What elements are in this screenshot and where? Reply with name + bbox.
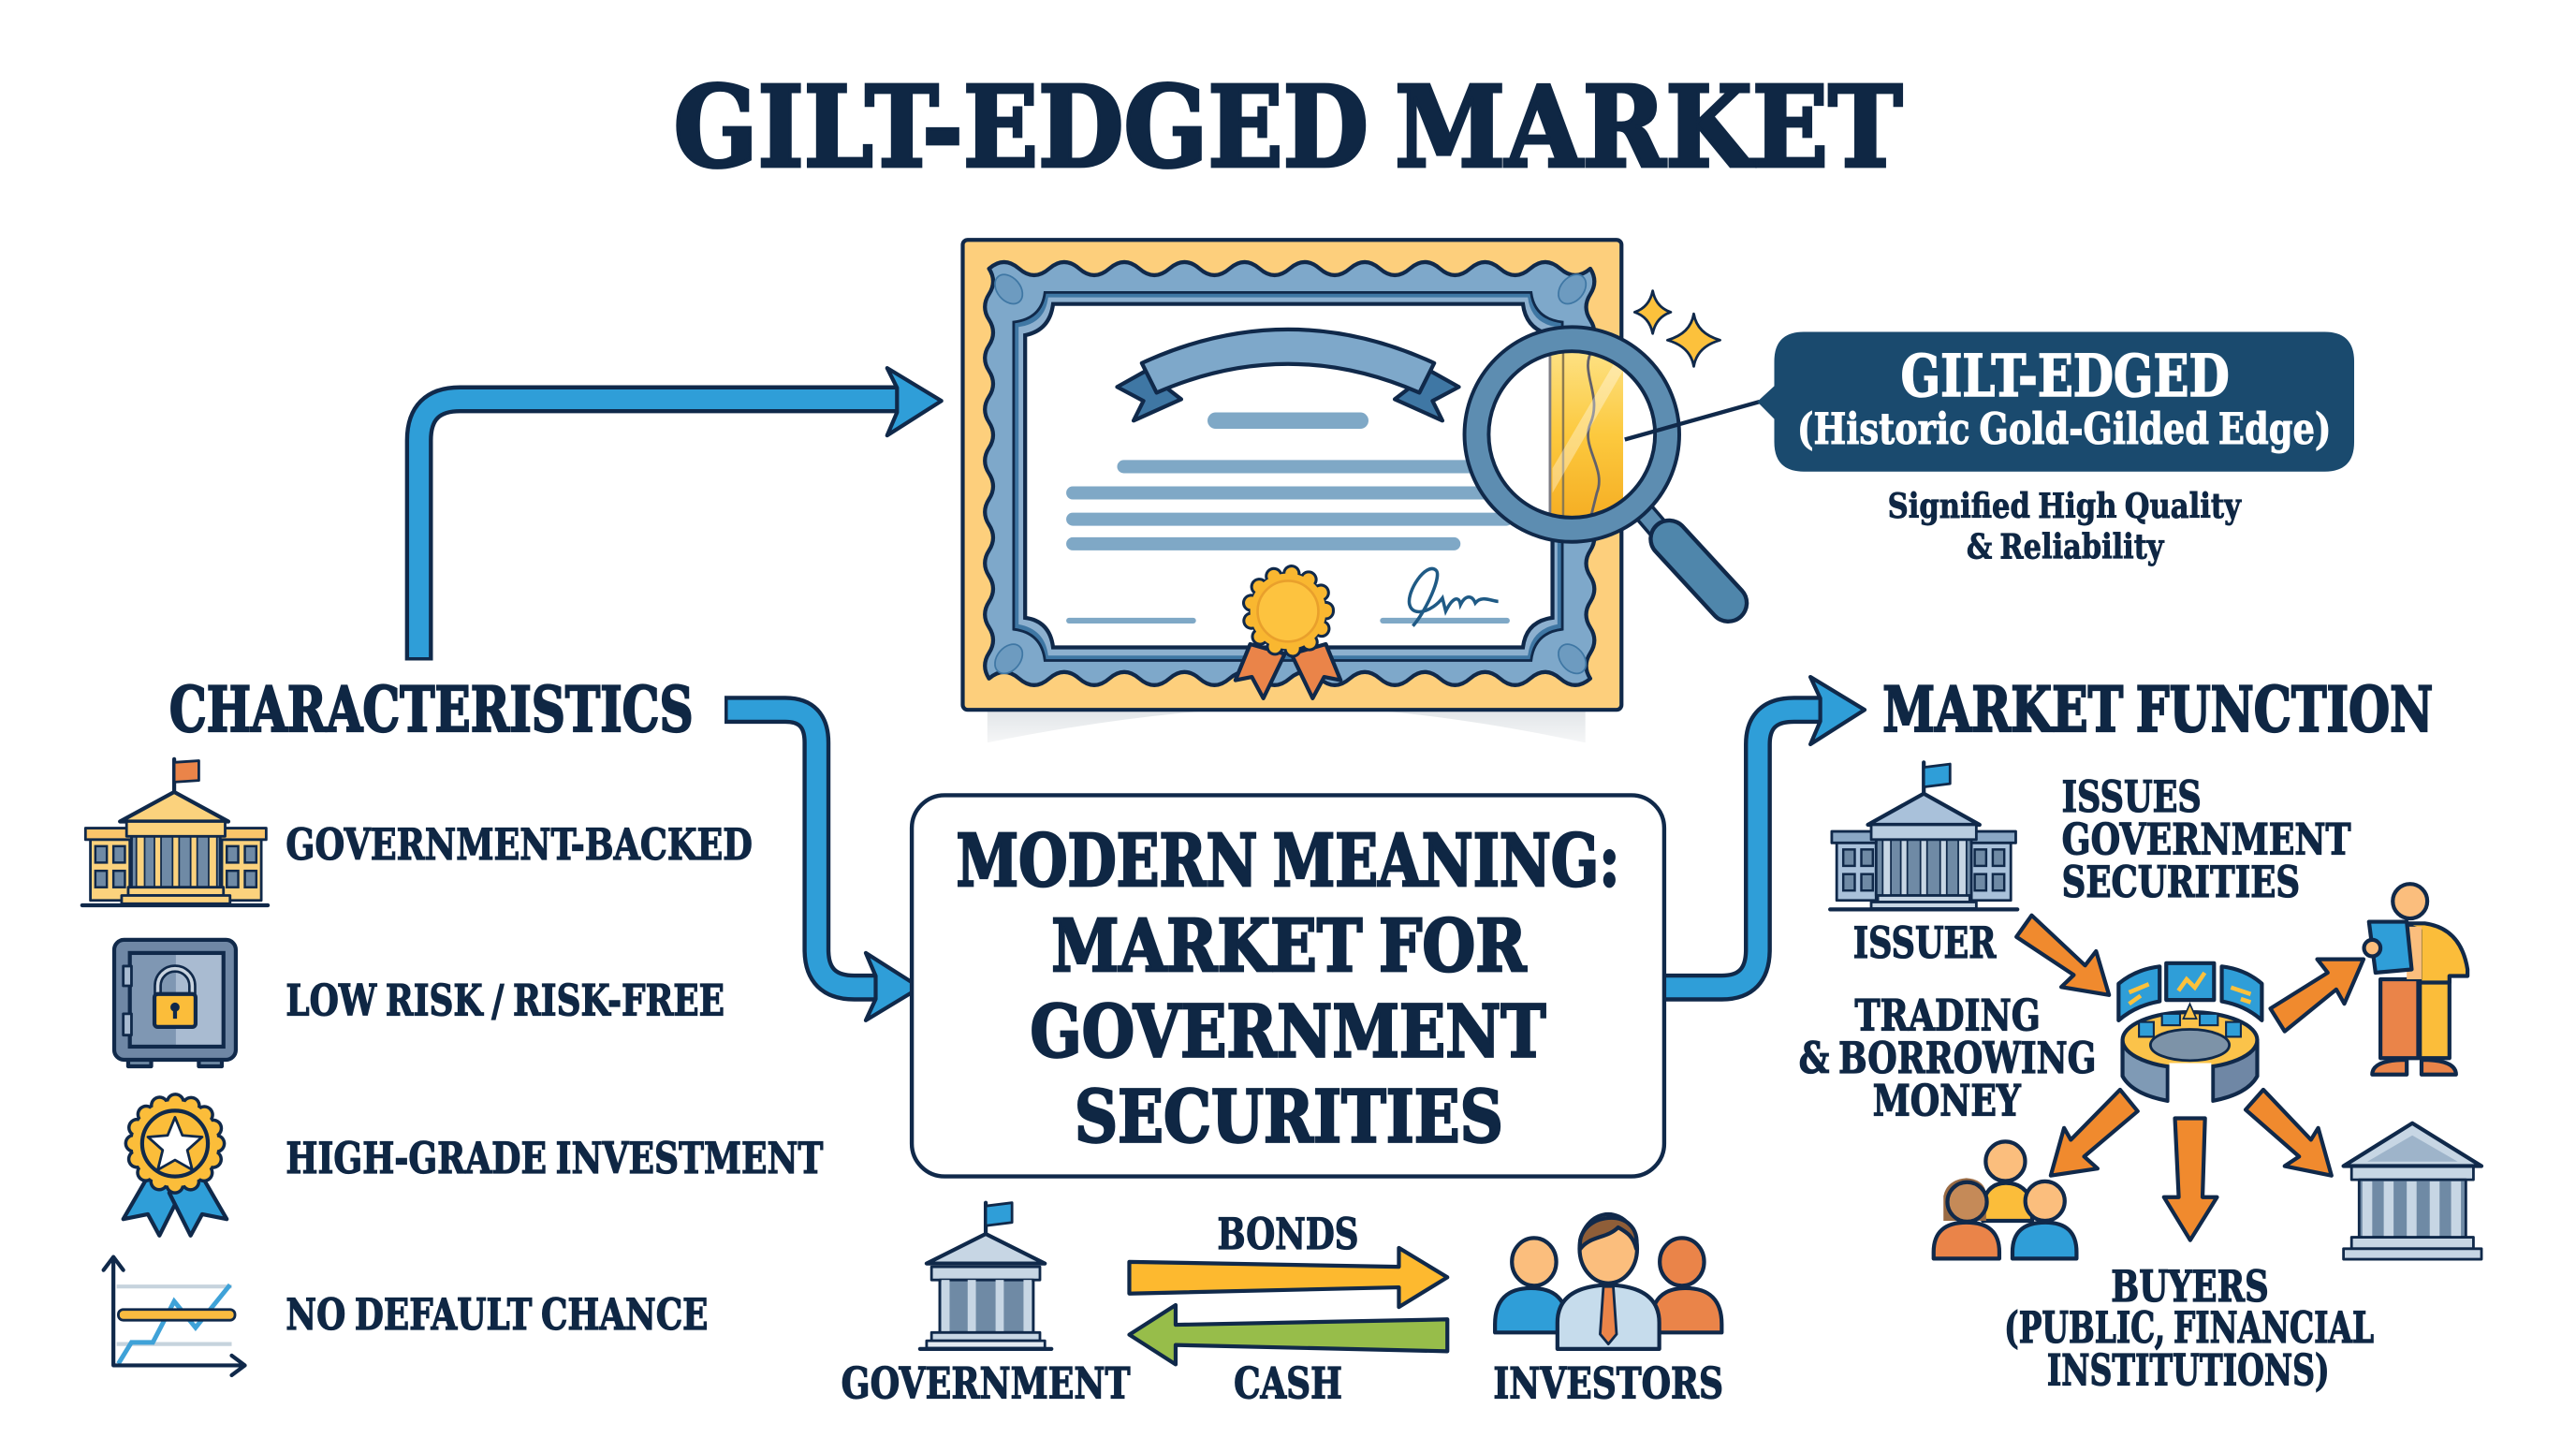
certificate wavy guilloche border bbox=[985, 262, 1594, 685]
hub screens bbox=[2118, 963, 2261, 1020]
icon: institution bank bbox=[2344, 1123, 2481, 1259]
arrow: market to buyers bbox=[2164, 1118, 2217, 1240]
label: trading and borrowing money: TRADING bbox=[1854, 990, 2041, 1040]
text: signified high quality: Signified High Quality bbox=[1888, 485, 2242, 526]
certificate inner frame bbox=[1014, 292, 1562, 661]
icon: stable line chart bbox=[104, 1257, 245, 1375]
arrow: issuer to market bbox=[2016, 916, 2109, 995]
icon: issuer building bbox=[1830, 762, 2017, 909]
panel: modern meaning: SECURITIES bbox=[1075, 1075, 1503, 1160]
certificate text bars bbox=[1066, 413, 1513, 624]
label: issues government securities: ISSUES bbox=[2062, 771, 2202, 822]
certificate frame light band bbox=[1018, 298, 1558, 655]
label: investors: INVESTORS bbox=[1493, 1358, 1723, 1409]
icon: person with tablet bbox=[2364, 884, 2467, 1075]
label: government-backed: GOVERNMENT-BACKED bbox=[285, 819, 753, 870]
arrow: market to institutions bbox=[2246, 1090, 2332, 1176]
panel: modern meaning: GOVERNMENT bbox=[1030, 989, 1546, 1074]
diagram: market function bbox=[1799, 762, 2481, 1395]
banner ribbon bbox=[1117, 330, 1459, 420]
arrow: characteristics to modern meaning bbox=[724, 710, 920, 1020]
panel: modern meaning: MODERN MEANING: bbox=[956, 818, 1620, 903]
certificate illustration bbox=[963, 240, 1728, 742]
label: issues government securities: SECURITIES bbox=[2062, 857, 2300, 907]
panel: modern meaning: MARKET FOR bbox=[1051, 903, 1527, 989]
arrow: cash bbox=[1129, 1305, 1447, 1364]
signature bbox=[1409, 568, 1499, 626]
icon: medal bbox=[124, 1101, 227, 1236]
arrow: modern meaning to market function bbox=[1666, 677, 1865, 988]
title bbox=[674, 62, 1902, 193]
icon: bottom government building bbox=[920, 1203, 1051, 1349]
label: buyers bbox=[2004, 1261, 2374, 1395]
sparkles bbox=[1634, 291, 1720, 366]
label: trading and borrowing money: & BORROWING bbox=[1799, 1033, 2096, 1083]
certificate corner ornaments bbox=[989, 270, 1591, 679]
gold seal with orange ribbons bbox=[1236, 572, 1340, 698]
label: bonds: BONDS bbox=[1218, 1209, 1358, 1259]
arrow: characteristics up to certificate bbox=[419, 368, 942, 661]
icon: investors bbox=[1495, 1214, 1721, 1349]
label: no default chance: NO DEFAULT CHANCE bbox=[285, 1289, 708, 1340]
panel: modern meaning bbox=[912, 795, 1664, 1177]
certificate gold background bbox=[963, 240, 1621, 710]
label: low risk: LOW RISK / RISK-FREE bbox=[285, 976, 724, 1026]
label: issuer: ISSUER bbox=[1853, 917, 1997, 968]
text: signified high quality: & Reliability bbox=[1967, 526, 2165, 567]
title: GILT-EDGED bbox=[674, 62, 1368, 193]
hub drum bbox=[2123, 1042, 2168, 1101]
callout: gilt-edged bbox=[1625, 332, 2354, 472]
callout subheading: (Historic Gold-Gilded Edge) bbox=[1797, 404, 2331, 454]
icon: safe bbox=[114, 940, 236, 1066]
characteristics list bbox=[82, 759, 823, 1375]
diagram: government and investors exchange bbox=[842, 1203, 1723, 1409]
label: trading and borrowing money bbox=[1799, 990, 2096, 1126]
heading: characteristics: CHARACTERISTICS bbox=[169, 672, 694, 746]
label: trading and borrowing money: MONEY bbox=[1873, 1076, 2021, 1126]
label: government: GOVERNMENT bbox=[842, 1358, 1131, 1409]
arrow: market to public bbox=[2051, 1090, 2138, 1176]
label: issues government securities: GOVERNMENT bbox=[2062, 814, 2351, 865]
title: MARKET bbox=[1395, 62, 1902, 193]
label: high-grade investment: HIGH-GRADE INVESTMENT bbox=[285, 1133, 823, 1183]
icon: trading hub bbox=[2118, 963, 2261, 1108]
text: signified high quality bbox=[1888, 485, 2242, 567]
icon: public buyers group bbox=[1934, 1141, 2076, 1258]
icon: government building bbox=[82, 759, 268, 905]
certificate shadow bbox=[988, 707, 1586, 742]
label: buyers: INSTITUTIONS) bbox=[2047, 1344, 2330, 1395]
callout heading: GILT-EDGED bbox=[1901, 343, 2230, 410]
label: issues government securities bbox=[2062, 771, 2351, 907]
arrow: bonds bbox=[1129, 1248, 1447, 1307]
label: buyers: (PUBLIC, FINANCIAL bbox=[2004, 1302, 2374, 1353]
certificate white paper bbox=[1025, 304, 1553, 647]
label: cash: CASH bbox=[1234, 1358, 1342, 1409]
label: buyers: BUYERS bbox=[2111, 1261, 2269, 1312]
arrow: market to person bbox=[2271, 960, 2364, 1032]
magnifying glass bbox=[1476, 337, 1728, 603]
